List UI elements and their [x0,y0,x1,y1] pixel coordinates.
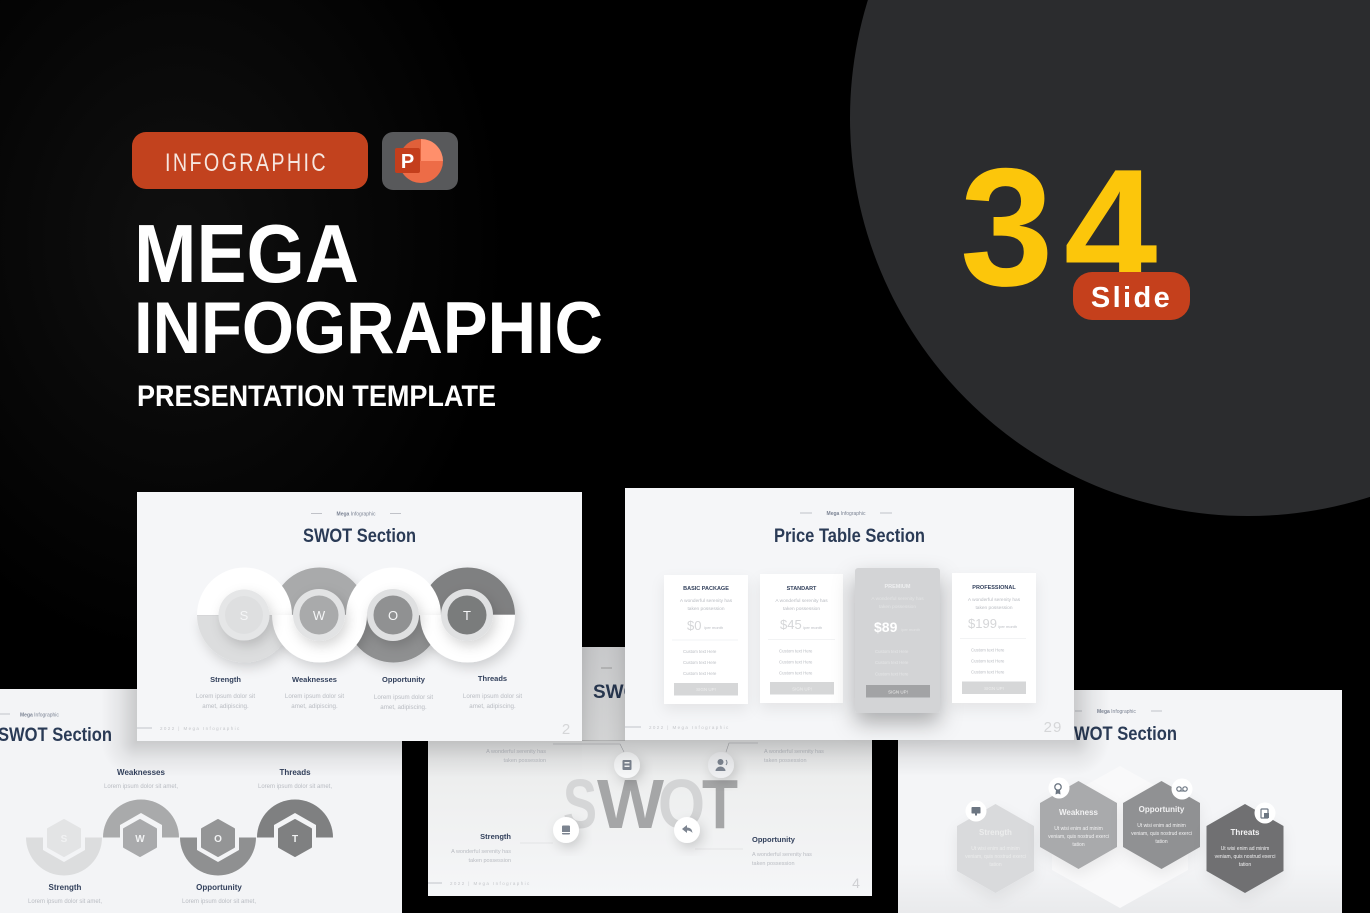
panel: bottom left SWOT slide: Weaknesses [117,768,165,777]
price card: professional: PROFESSIONAL [972,585,1016,591]
hexagon O: O [214,834,222,845]
hexagon: opportunity: Opportunity [1139,805,1185,814]
circle W [293,589,345,641]
price card: professional: taken possession [975,605,1013,611]
panel: bottom right SWOT slide: SWOT Section [1063,724,1177,745]
panel: middle SWOT slide: A wonderful serenity has [486,749,546,755]
circle S [218,590,270,640]
circle T [441,589,493,641]
price card: professional: A wonderful serenity has [968,597,1021,603]
hexagon: strength: tation [989,862,1002,868]
icon: notes [614,752,640,778]
panel: middle SWOT slide: A wonderful serenity has [764,749,824,755]
hexagon S: S [61,834,68,845]
panel: SWOT section slide: Lorem ipsum dolor sit [463,693,522,700]
hexagon T: T [292,834,298,845]
panel: middle SWOT slide: SWOT Section [593,682,724,703]
hexagon: strength: veniam, quis nostrud exerci [965,854,1026,860]
price card: standard [760,574,843,703]
hexagon: weakness: Weakness [1059,808,1099,817]
price card: premium: taken possession [879,604,916,610]
hexagon: strength: Strength [979,828,1012,837]
slide count number [960,133,1157,322]
panel: middle SWOT slide: taken possession [764,758,806,764]
circle T: T [463,608,471,623]
panel: middle SWOT slide: taken possession [752,861,794,867]
panel: SWOT section slide: Lorem ipsum dolor sit [285,693,344,700]
price card: professional: Custom text Here [971,658,1005,664]
panel: SWOT section slide: Threads [478,674,507,683]
price card: standard: /per month [803,625,822,630]
hexagon: opportunity [1123,781,1200,869]
slide count number: 3 [960,133,1053,321]
hexagon: threats: Threats [1231,828,1260,837]
big SWOT word [563,765,738,843]
hexagon: weakness: veniam, quis nostrud exerci [1048,834,1109,840]
title: MEGA [134,207,359,300]
icon: user speaking [708,752,734,778]
price card: basic: Custom text Here [683,671,717,676]
circle S: S [240,608,249,623]
panel: SWOT section slide: 2022 | Mega Infographic [160,726,241,731]
price card: premium: $89 [874,619,898,635]
price card: standard: STANDART [787,586,817,592]
price card: basic [664,575,748,704]
panel: bottom left SWOT slide: Strength [49,883,82,892]
panel: SWOT section slide: Lorem ipsum dolor sit [374,694,433,701]
hexagon S [48,820,80,856]
infographic badge [132,132,368,189]
panel: middle SWOT slide: Strength [480,832,511,841]
price card: premium: PREMIUM [885,584,911,590]
hexagon W [124,820,156,856]
icon: PowerPoint: P [401,151,414,173]
price card: standard: Custom text Here [779,670,813,676]
panel: price table slide [625,488,1074,740]
price card: basic: taken possession [687,606,725,612]
panel: middle SWOT slide: A wonderful serenity has [451,849,511,855]
panel: SWOT section slide: Lorem ipsum dolor sit [196,693,255,700]
panel: SWOT section slide: Mega Infographic [337,512,376,518]
big SWOT word: T [702,765,738,843]
panel: bottom left SWOT slide: Opportunity [196,883,242,892]
panel: SWOT section slide: Opportunity [382,675,426,684]
hexagon: threats [1206,804,1284,893]
price card: basic: BASIC PACKAGE [683,586,729,592]
hexagon: threats: tation [1239,862,1251,868]
panel: bottom left SWOT slide: Lorem ipsum dolor sit amet, [28,899,102,905]
panel: SWOT section slide: 2 [562,721,570,738]
panel: middle SWOT slide: taken possession [504,758,546,764]
panel: bottom left SWOT slide [0,689,402,913]
price card: professional [952,573,1036,703]
panel: price table slide: 2022 | Mega Infographic [649,725,730,730]
price card: premium: SIGN UP! [888,690,908,694]
price card: professional: $199 [968,616,997,631]
panel: middle SWOT slide: Opportunity [752,835,796,844]
circle O: O [388,608,398,623]
panel: bottom right SWOT slide [898,690,1342,913]
panel: SWOT section slide: amet, adipiscing. [380,704,427,711]
price card: standard: Custom text Here [779,660,813,664]
icon: reply arrow [674,817,700,843]
panel: SWOT section slide: amet, adipiscing. [469,703,516,710]
icon: award [1048,778,1070,798]
price card: standard: taken possession [783,606,820,612]
hexagon O [202,820,234,856]
title: INFOGRAPHIC [134,288,603,369]
panel: bottom left SWOT slide: Lorem ipsum dolor sit amet, [104,784,178,790]
big SWOT word: W [597,765,664,843]
hexagon W: W [135,834,145,845]
panel: SWOT section slide: SWOT Section [303,526,416,547]
panel: middle SWOT slide: 2022 | Mega Infographic [450,881,531,886]
panel: middle SWOT slide: 4 [852,875,860,891]
price card: basic: Custom text Here [683,649,717,654]
price card: professional: Custom text Here [971,648,1005,652]
hexagon: threats: Ut wisi enim ad minim [1221,846,1269,852]
slide pill [1073,272,1190,320]
circle O [367,589,419,641]
hexagon: strength [957,804,1034,893]
swot circle chain [197,568,515,662]
price card: standard: SIGN UP! [792,686,812,692]
icon: voicemail [1172,778,1192,800]
panel: middle SWOT slide: A wonderful serenity has [752,852,812,858]
infographic badge: INFOGRAPHIC [165,149,328,177]
icon: PowerPoint [382,132,458,190]
price card: premium: Custom text Here [875,649,909,654]
price card: premium: Custom text Here [875,672,909,676]
price card: basic: $0 [687,618,701,633]
hexagon: weakness: Ut wisi enim ad minim [1054,826,1103,832]
slide pill: Slide [1091,282,1172,314]
panel: middle SWOT slide: taken possession [468,858,511,864]
price card: premium [855,568,940,713]
price card: professional: SIGN UP! [984,686,1004,691]
price card: premium: A wonderful serenity has [871,596,924,602]
hexagon: threats: veniam, quis nostrud exerci [1215,854,1275,860]
panel: middle SWOT slide [428,647,872,896]
hexagon: weakness: tation [1072,842,1085,848]
price card: basic: /per month [704,625,723,630]
panel: price table slide: 29 [1044,719,1062,736]
dark circle [850,0,1370,516]
panel: SWOT section slide: amet, adipiscing. [202,703,249,710]
hexagon: strength: Ut wisi enim ad minim [971,846,1020,852]
price card: standard: Custom text Here [779,648,813,654]
slide count number: 4 [1064,134,1157,322]
panel: price table slide: Mega Infographic [827,511,866,517]
icon: book [553,817,579,843]
hexagon: opportunity: veniam, quis nostrud exerci [1131,831,1192,837]
price card: premium: Custom text Here [875,660,909,665]
panel: bottom right SWOT slide: Mega Infographic [1097,709,1136,715]
price card: basic: SIGN UP! [696,687,716,692]
price card: professional: Custom text Here [971,670,1005,674]
shadow around the two front slides [101,647,1110,777]
circle W: W [313,608,326,623]
panel: bottom left SWOT slide: Mega Infographic [20,712,59,718]
price card: standard: $45 [780,617,802,632]
price card: professional: /per month [998,624,1017,629]
price card: premium: /per month [901,627,920,632]
title [134,207,603,369]
panel: bottom left SWOT slide: SWOT Section [0,725,112,746]
icon: monitor [966,800,986,822]
panel: SWOT section slide: Weaknesses [292,675,337,684]
hexagon: weakness [1040,781,1117,869]
panel: price table slide: Price Table Section [774,526,925,547]
big SWOT word: S [563,765,597,843]
price card: basic: Custom text Here [683,660,717,665]
price card: standard: A wonderful serenity has [775,598,828,604]
hexagon T [279,820,311,856]
hexagon: opportunity: Ut wisi enim ad minim [1137,823,1186,829]
icon: document [1254,802,1276,824]
big SWOT word: O [658,765,705,843]
panel: SWOT section slide: Strength [210,675,241,684]
panel: SWOT section slide [137,492,582,741]
hexagon: opportunity: tation [1155,839,1168,845]
panel: bottom left SWOT slide: Lorem ipsum dolor sit amet, [258,784,332,790]
panel: bottom left SWOT slide: Threads [279,768,311,777]
subtitle: PRESENTATION TEMPLATE [137,380,496,413]
price card: basic: A wonderful serenity has [680,598,733,604]
panel: SWOT section slide: amet, adipiscing. [291,703,338,710]
panel: bottom left SWOT slide: Lorem ipsum dolor sit amet, [182,899,256,905]
